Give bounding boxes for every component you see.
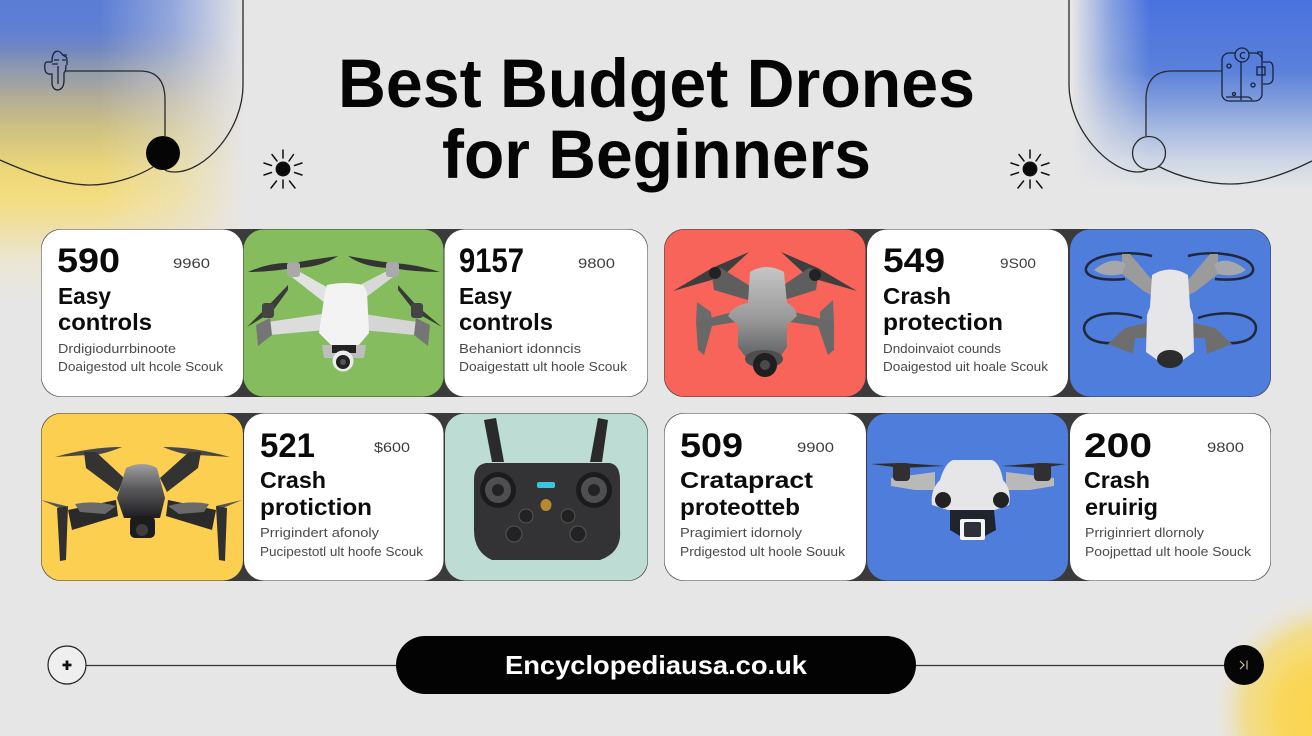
card: 9157 easy controls: 9157	[459, 242, 524, 280]
icon: top left gadget	[45, 51, 67, 90]
card: 9157 easy controls: Easy	[459, 283, 512, 309]
card: 590 easy controls: Easy	[58, 283, 111, 309]
title: for Beginners	[442, 116, 871, 193]
card: 590 easy controls: 9960	[173, 255, 210, 271]
card: 549 crash protection: 9S00	[1000, 255, 1036, 271]
card: 590 easy controls: Drdigiodurrbinoote	[58, 341, 176, 356]
card: 521 crash protiction	[244, 414, 444, 580]
panel: bottom right card strip	[664, 413, 1271, 581]
card: 521 crash protiction: 521	[260, 427, 315, 465]
photo: white drone front view on blue	[867, 414, 1068, 580]
card: 521 crash protiction: Pucipestotl ult hoofe Scouk	[260, 544, 424, 559]
card: 200 crash eruirig: 9800	[1207, 439, 1244, 455]
card: 590 easy controls	[42, 230, 243, 396]
card: 9157 easy controls: 9800	[578, 255, 615, 271]
card: 200 crash eruirig: Crash	[1084, 467, 1150, 493]
icon: left sun	[264, 150, 302, 188]
footer connector line	[86, 664, 1226, 666]
card: 9157 easy controls: Behaniort idonncis	[459, 341, 582, 356]
photo: dark drone on yellow	[41, 414, 243, 580]
card: 509 cratapract proteotteb	[664, 414, 866, 580]
card: 200 crash eruirig: eruirig	[1085, 494, 1158, 520]
card: 9157 easy controls: controls	[459, 309, 553, 335]
photo: white drone on green	[244, 230, 444, 396]
photo: white drone with guards on blue	[1070, 230, 1270, 396]
card: 200 crash eruirig: Prriginriert dlornoly	[1085, 525, 1205, 540]
footer url pill	[396, 636, 916, 694]
icon: right sun	[1011, 150, 1049, 188]
card: 200 crash eruirig: 200	[1084, 427, 1152, 465]
photo: remote controller on mint	[445, 414, 648, 580]
card: 509 cratapract proteotteb: Pragimiert idornoly	[680, 525, 803, 540]
card: 549 crash protection: Dndoinvaiot counds	[883, 341, 1002, 356]
card: 9157 easy controls: Doaigestatt ult hoole Scouk	[459, 359, 628, 374]
card: 590 easy controls: 590	[57, 242, 120, 280]
card: 509 cratapract proteotteb: 9900	[797, 439, 834, 455]
panel: bottom left card strip	[41, 413, 648, 581]
card: 549 crash protection: 549	[883, 242, 945, 280]
panel: top right card strip	[664, 229, 1271, 397]
card: 200 crash eruirig: Poojpettad ult hoole Souck	[1085, 544, 1252, 559]
decoration: left black dot	[146, 136, 180, 170]
card: 590 easy controls: controls	[58, 309, 152, 335]
card: 509 cratapract proteotteb: proteotteb	[680, 494, 800, 520]
card: 509 cratapract proteotteb: Prdigestod ult hoole Souuk	[680, 544, 846, 559]
card: 509 cratapract proteotteb: 509	[680, 427, 743, 465]
card: 200 crash eruirig	[1070, 414, 1270, 580]
card: 521 crash protiction: Prrigindert afonoly	[260, 525, 380, 540]
title	[338, 45, 975, 193]
card: 521 crash protiction: Crash	[260, 467, 326, 493]
card: 549 crash protection: Doaigestod uit hoale Scouk	[883, 359, 1049, 374]
icon: footer plus button	[48, 646, 86, 684]
card: 549 crash protection: Crash	[883, 283, 951, 309]
decoration: top left line art	[0, 0, 243, 185]
title: Best Budget Drones	[338, 45, 975, 122]
card: 590 easy controls: Doaigestod ult hcole Scouk	[58, 359, 224, 374]
card: 521 crash protiction: protiction	[260, 494, 372, 520]
panel: top left card strip	[41, 229, 648, 397]
card: 549 crash protection: protection	[883, 309, 1003, 335]
card: 9157 easy controls	[444, 230, 648, 396]
photo: grey drone on red	[664, 230, 866, 396]
icon: footer next button	[1224, 645, 1264, 685]
card: 509 cratapract proteotteb: Cratapract	[680, 467, 813, 493]
icon: top right gadget	[1222, 48, 1273, 101]
footer url pill: Encyclopediausa.co.uk	[505, 650, 808, 680]
decoration: top right line art	[1069, 0, 1312, 184]
card: 549 crash protection	[867, 230, 1068, 396]
card: 521 crash protiction: $600	[374, 439, 410, 455]
